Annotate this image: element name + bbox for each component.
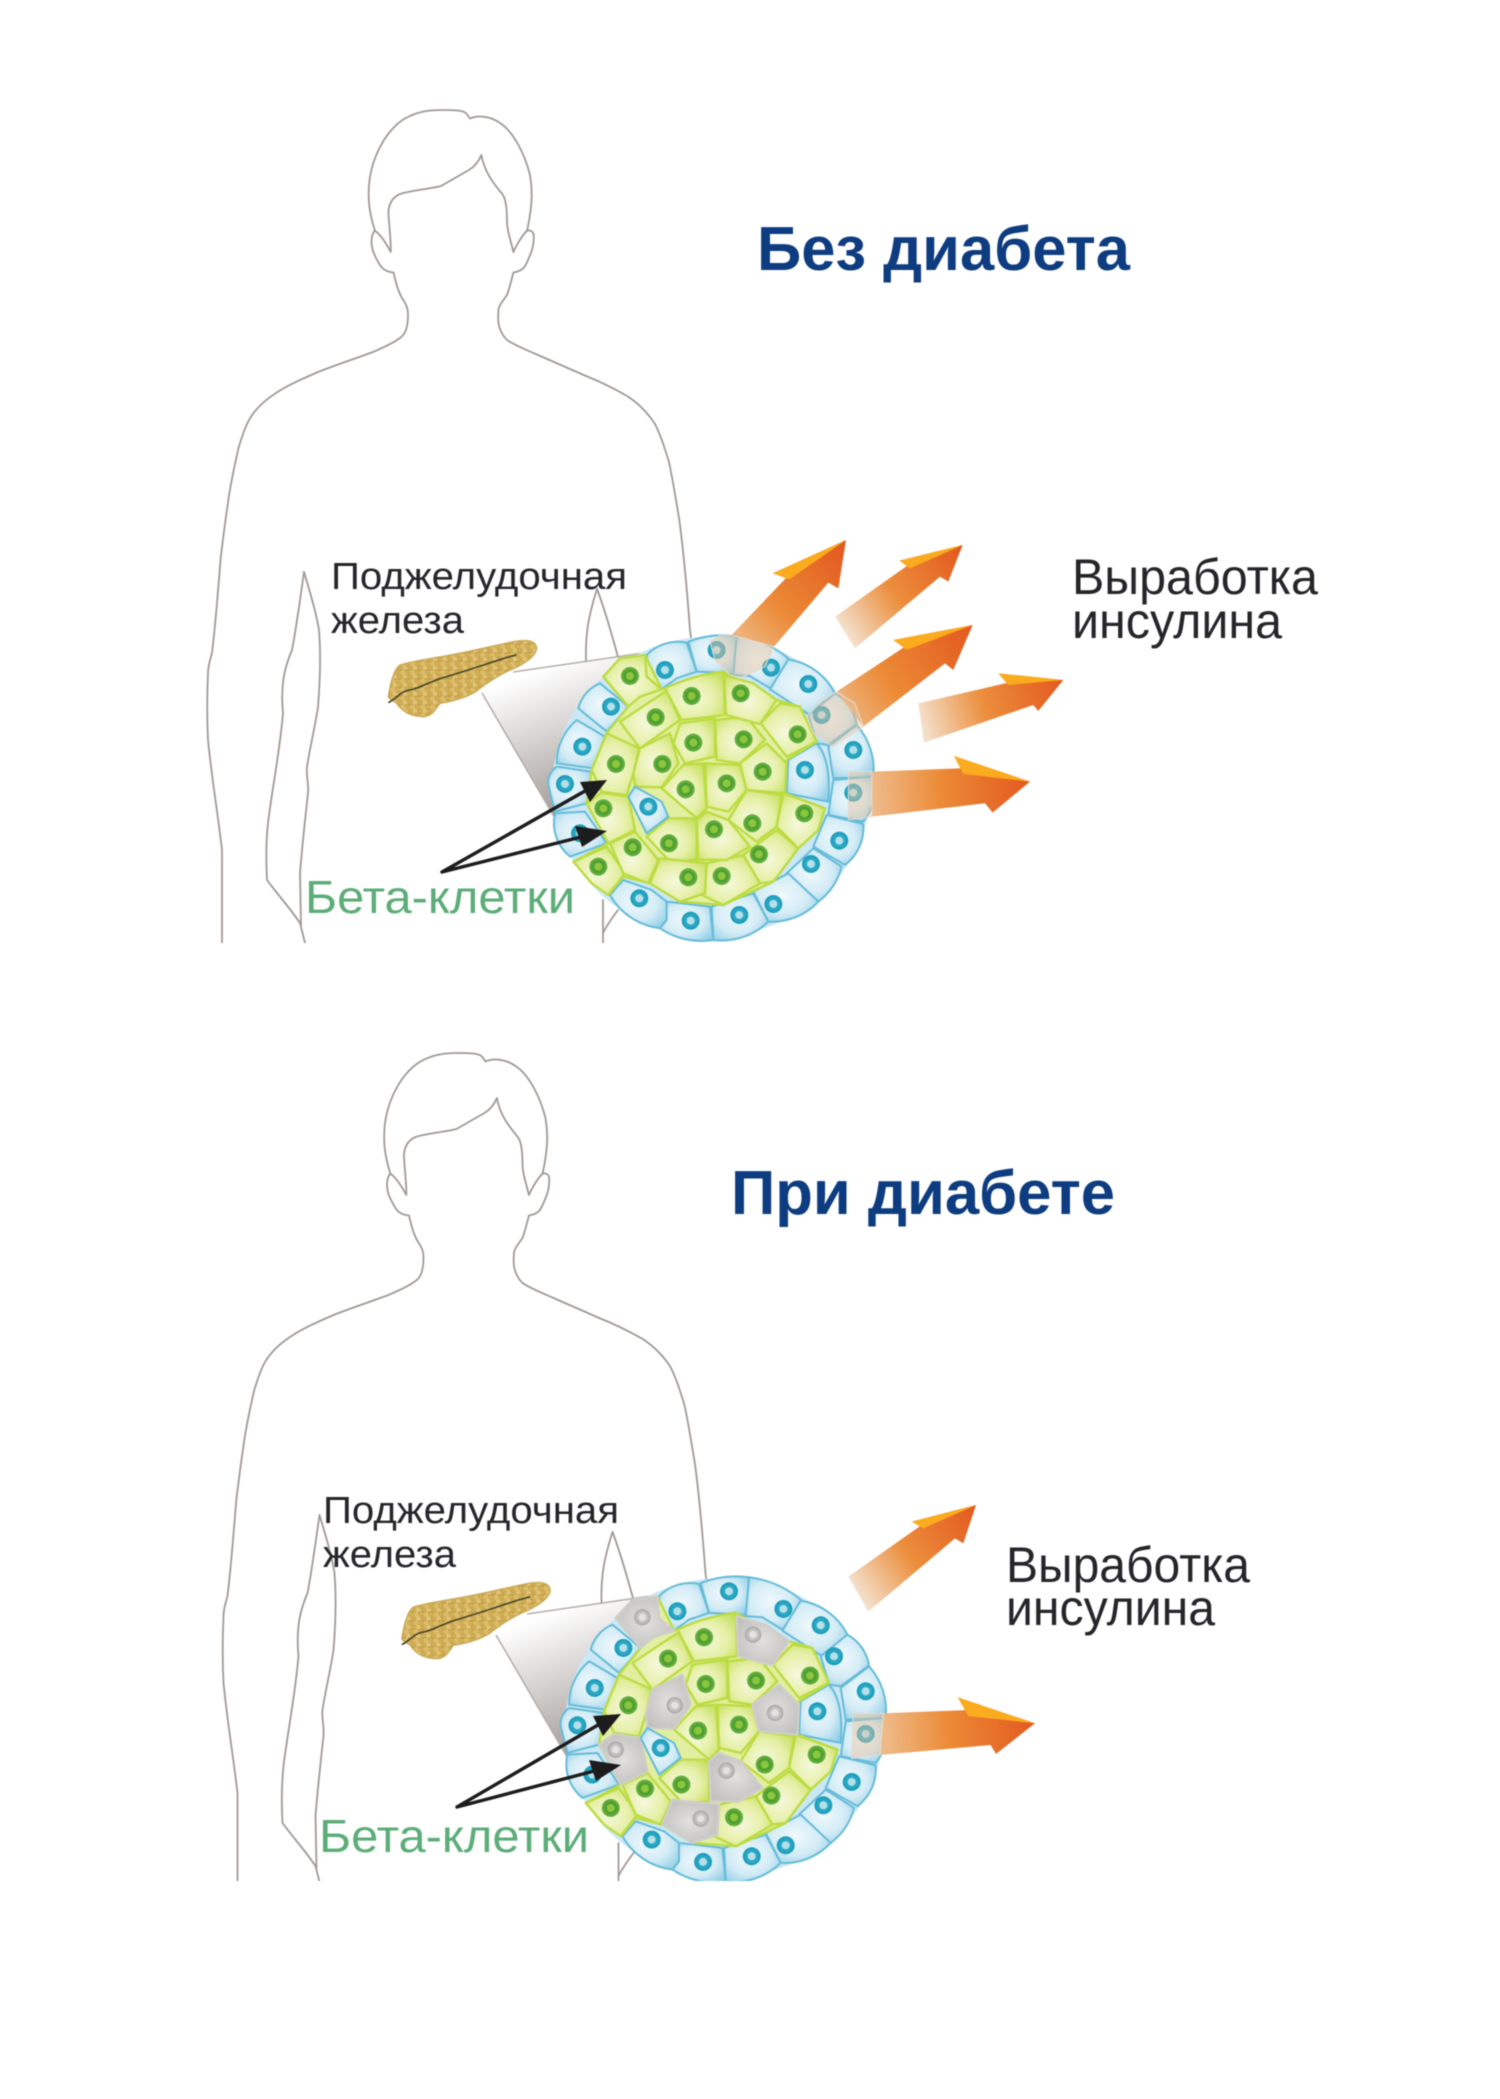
body outline [207, 110, 692, 943]
label: insulin production [1006, 1537, 1250, 1636]
arrow 2 [852, 1697, 1035, 1758]
label: beta cells: Бета-клетки [305, 871, 575, 923]
label: insulin production [1072, 549, 1318, 649]
label: beta cells: Бета-клетки [319, 1810, 589, 1862]
islet cell cluster [548, 635, 874, 941]
icon: pancreas [388, 640, 537, 717]
arrow 1 [710, 540, 846, 678]
pointer arrows to beta cells [457, 1714, 621, 1807]
arrow 3 [807, 625, 973, 747]
icon: pancreas [402, 1582, 550, 1659]
pointer arrows to beta cells [442, 780, 607, 872]
label: pancreas: Поджелудочная [323, 1490, 619, 1532]
arrow 4 [918, 673, 1063, 743]
label: pancreas: железа [331, 600, 465, 642]
insulin arrows [710, 540, 1063, 820]
label: insulin production: Выработка [1072, 549, 1318, 605]
arrow 1 [848, 1505, 976, 1612]
label: insulin production: инсулина [1006, 1580, 1215, 1636]
arrow 5 [848, 756, 1030, 820]
magnification wedge [482, 652, 650, 835]
heading: without diabetes: Без диабета [757, 215, 1130, 284]
islet cell cluster with damaged cells [561, 1576, 887, 1882]
label: pancreas [323, 1490, 619, 1576]
label: insulin production: инсулина [1072, 593, 1282, 649]
insulin arrows [848, 1505, 1035, 1758]
label: pancreas: железа [323, 1534, 457, 1576]
arrow 2 [835, 545, 963, 648]
body outline [223, 1053, 708, 1886]
magnification wedge [496, 1594, 664, 1777]
label: insulin production: Выработка [1006, 1537, 1250, 1593]
panel: with diabetes [223, 1053, 1250, 1886]
panel: without diabetes [207, 110, 1318, 943]
label: pancreas: Поджелудочная [331, 556, 627, 598]
label: pancreas [331, 556, 627, 642]
heading: with diabetes: При диабете [731, 1159, 1115, 1228]
